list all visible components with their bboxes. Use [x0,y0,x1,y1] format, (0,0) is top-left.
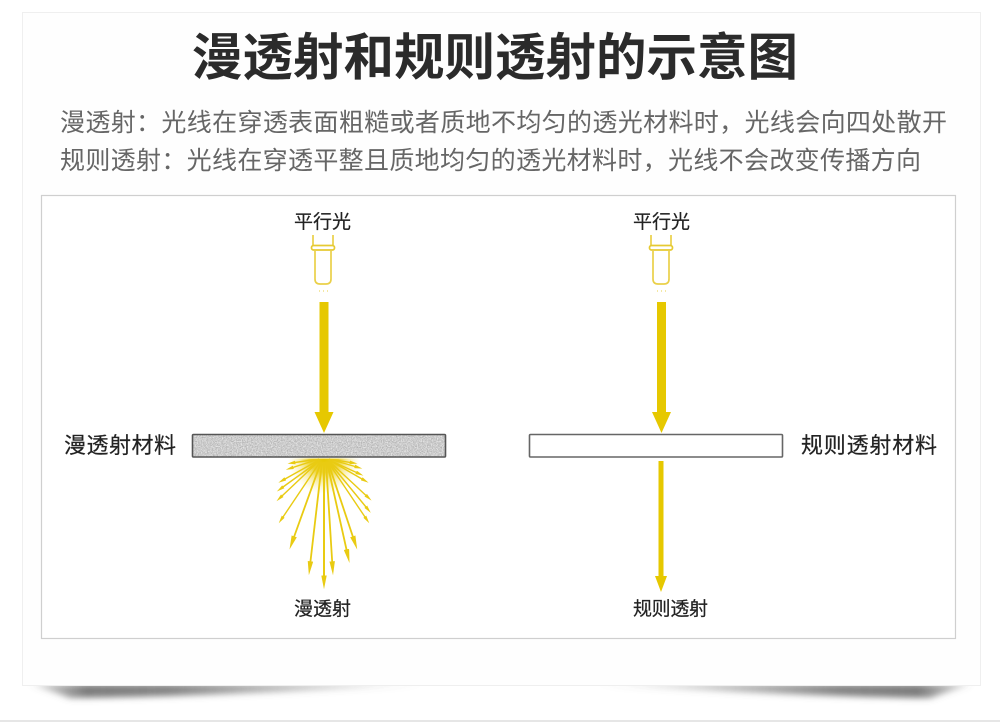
arrow: transmitted light [655,461,667,592]
right diagram: regular transmission [530,211,937,620]
label: diffuse material: 漫透射材料 [64,433,176,458]
icon: lamp right [650,235,672,291]
material bar: regular [530,434,782,457]
label: regular transmission: 规则透射 [633,598,708,620]
icon: lamp left [312,235,334,291]
arrow: incident light left [314,302,334,433]
description text [60,109,947,175]
description: regular transmission: 规则透射：光线在穿透平整且质地均匀的透光材料时，光线不会改变传播方向 [60,147,921,175]
material bar: diffuse [192,434,446,457]
left diagram: diffuse transmission [64,211,446,620]
label: regular material: 规则透射材料 [801,433,937,458]
label: parallel light left: 平行光 [294,211,351,233]
diagram panel [42,196,956,638]
bottom card shadow [0,684,1000,722]
label: diffuse transmission: 漫透射 [294,598,351,620]
scattered rays [282,458,366,576]
arrow: incident light right [652,302,671,433]
title: 漫透射和规则透射的示意图 [192,29,798,86]
description: diffuse transmission: 漫透射：光线在穿透表面粗糙或者质地不均匀的透光材料时，光线会向四处散开 [60,109,947,137]
label: parallel light right: 平行光 [633,211,690,233]
